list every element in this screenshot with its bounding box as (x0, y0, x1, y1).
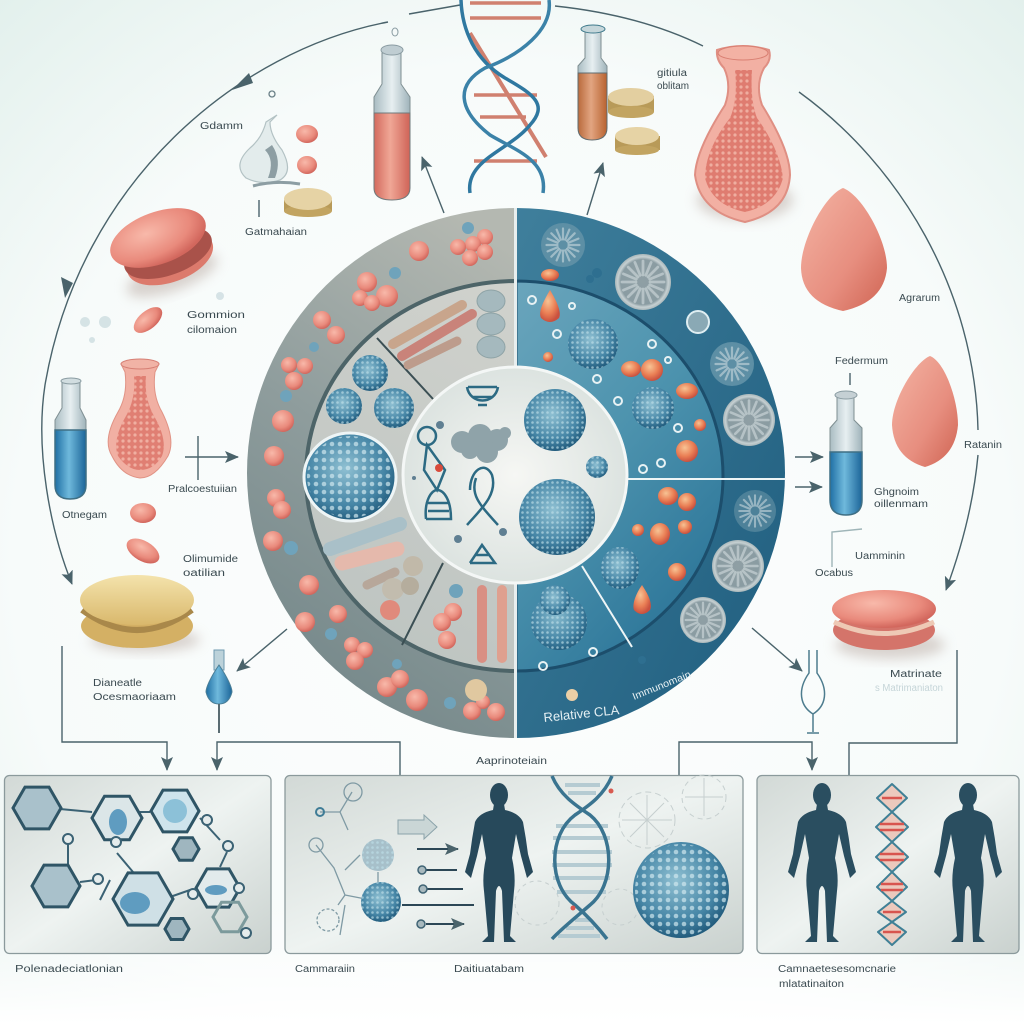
label: Federmum (835, 356, 888, 367)
center disc (403, 367, 627, 583)
panel: left gray half (247, 208, 516, 738)
rod bundles (342, 305, 502, 701)
coins top right (608, 88, 660, 155)
small ring (269, 91, 275, 97)
large vase top right (695, 46, 793, 222)
panel: bottom middle (285, 775, 743, 954)
dropper right (801, 650, 825, 733)
dna helix middle panel (552, 776, 612, 939)
outer cycle arrows (42, 5, 978, 775)
small drop (392, 28, 398, 36)
icon: DNA in center (418, 387, 498, 563)
label: Gommion (187, 310, 245, 321)
label: immunomain: Immunomain (631, 669, 693, 703)
label: Pralcoestuiian (168, 484, 237, 495)
label: Uamminin (855, 551, 905, 562)
label: Olimumide (183, 554, 238, 565)
label: Aaprinoteiain (476, 756, 547, 767)
label: oillenmam (874, 499, 928, 510)
large cell (633, 842, 729, 938)
red cells (122, 503, 164, 569)
orange test tube top (578, 25, 607, 140)
icon: human figure (465, 783, 533, 942)
small dots in center (412, 421, 507, 543)
label: Ghgnoim (874, 487, 919, 498)
mesh ovals upper (330, 290, 505, 549)
macaron right (832, 590, 945, 659)
label: mlatatinaiton (779, 979, 844, 990)
red dots (570, 788, 614, 910)
label: Cammaraiin (295, 964, 355, 975)
label: Dianeatle (93, 678, 142, 689)
central circle diagram (247, 208, 786, 738)
label: gitiula (657, 68, 687, 79)
panel: bottom left molecules (4, 776, 271, 954)
cells in blue centre (519, 389, 608, 555)
sketch flowers (515, 775, 726, 925)
panel: bottom right (757, 776, 1019, 954)
label: oblitam (657, 81, 689, 92)
dropper left (206, 650, 232, 733)
arrowhead: upper left arc (232, 73, 253, 90)
orange beads and drops (540, 269, 706, 614)
flask top left (240, 115, 300, 186)
blue tube right (830, 391, 862, 515)
label: cilomaion (187, 325, 237, 336)
large cell left (304, 355, 414, 521)
red test tube top (374, 45, 410, 200)
gold macaron (80, 575, 200, 652)
vase left (108, 359, 171, 478)
label: Agrarum (899, 293, 940, 304)
label: Ratanin (964, 440, 1002, 451)
label: Ocabus (815, 568, 853, 579)
icon: centre molecule cluster (451, 424, 511, 463)
icon: human figure (788, 783, 856, 942)
label: Otnegam (62, 510, 107, 521)
drop right (892, 356, 958, 467)
arrowhead: left arc (61, 277, 73, 298)
molecule sketch (309, 783, 381, 935)
label: Camnaetesesomcnarie (778, 964, 897, 975)
faint dots (80, 292, 224, 343)
label: Polenadeciatlonian (15, 964, 123, 975)
red beads (263, 229, 505, 721)
label: Gdamm (200, 121, 243, 132)
label: oatilian (183, 568, 225, 579)
red beads (296, 125, 318, 174)
red cell (129, 302, 167, 338)
dna chain (876, 784, 908, 945)
top DNA helix (461, 0, 549, 193)
panel: right blue half (514, 208, 786, 738)
small white rings (528, 296, 682, 670)
label faint: s Matrimaniaton (875, 683, 943, 694)
blue tube left (55, 378, 86, 499)
arrows (402, 849, 474, 928)
coin (284, 188, 332, 217)
macaron left top (102, 196, 223, 306)
label: Daitiuatabam (454, 964, 524, 975)
blue small beads (280, 222, 646, 709)
tan bead (566, 689, 578, 701)
icon: human figure (934, 783, 1002, 942)
label: Matrinate (890, 669, 943, 680)
label: Relative CLA: Relative CLA (543, 702, 620, 725)
blue ring cells (531, 223, 776, 650)
label: Ocesmaoriaam (93, 692, 176, 703)
label: Gatmahaian (245, 227, 307, 238)
drop top right (801, 188, 887, 311)
